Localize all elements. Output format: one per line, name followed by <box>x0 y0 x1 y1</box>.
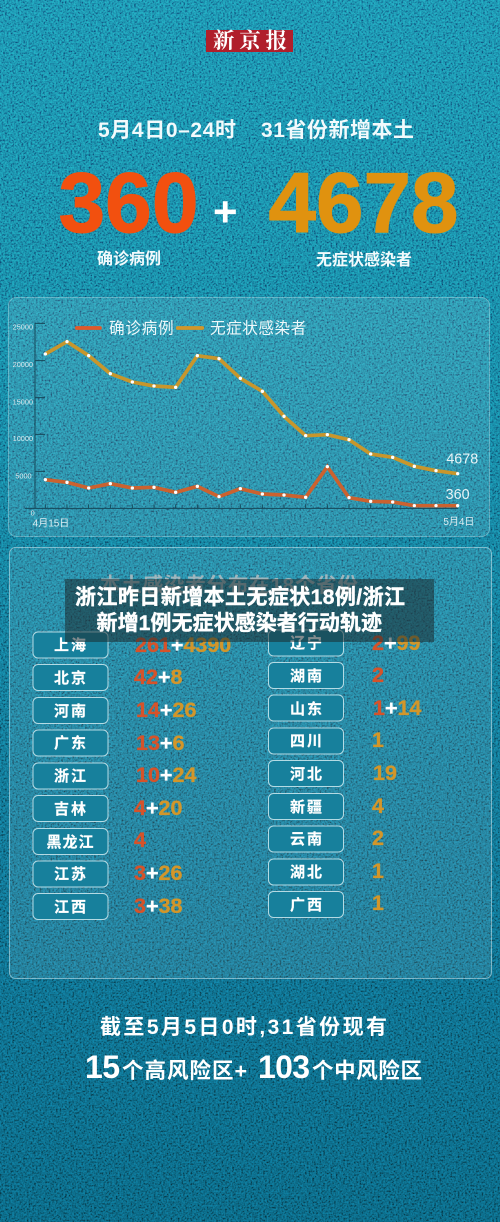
row: 江西: 3+38 <box>134 894 182 918</box>
row: 湖南: 2 <box>372 663 384 687</box>
row: 辽宁 <box>268 630 420 656</box>
end value labels: 4678 <box>446 451 478 467</box>
line: confirmed <box>45 467 458 506</box>
headline overlay banner: 新增1例无症状感染者行动轨迹 <box>96 611 382 635</box>
row: 辽宁: 辽宁 <box>290 634 324 652</box>
legend: 确诊病例 <box>109 320 174 338</box>
y axis labels: 15000 <box>13 398 33 407</box>
panel heading: 本土感染者分布在18个省份 <box>100 574 358 597</box>
row: 黑龙江: 黑龙江 <box>46 833 95 851</box>
row: 山东 <box>268 695 421 721</box>
footer: risk area summary: 个高风险区+ <box>122 1058 247 1083</box>
footer: risk area summary <box>85 1016 422 1085</box>
headline overlay banner <box>65 579 434 642</box>
row: 云南: 云南 <box>290 831 324 848</box>
row: 江西 <box>33 894 182 920</box>
plus sign: + <box>213 188 238 235</box>
y axis labels <box>13 323 35 517</box>
row: 上海 <box>33 632 231 658</box>
row: 河南: 14+26 <box>136 698 196 722</box>
line chart <box>13 320 478 529</box>
x axis labels: 4月15日 <box>33 517 69 529</box>
row: 广西: 广西 <box>290 896 324 914</box>
row: 山东: 1+14 <box>373 696 421 720</box>
x axis labels <box>33 516 474 529</box>
row: 浙江: 10+24 <box>136 763 196 787</box>
row: 江苏: 3+26 <box>134 861 182 885</box>
row: 新疆 <box>268 794 384 820</box>
row: 浙江: 浙江 <box>54 767 88 785</box>
row: 广西 <box>268 891 384 918</box>
row: 云南 <box>268 826 384 852</box>
row: 辽宁: 2+99 <box>372 631 420 655</box>
row: 云南: 2 <box>372 826 384 850</box>
row: 新疆: 4 <box>372 794 384 818</box>
footer: risk area summary: 103 <box>258 1049 310 1085</box>
row: 江西: 江西 <box>54 899 88 916</box>
heading: date and scope <box>98 118 414 142</box>
row: 北京 <box>33 664 182 690</box>
y axis labels: 0 <box>31 508 35 517</box>
row: 北京: 北京 <box>54 669 88 687</box>
y axis labels: 10000 <box>13 434 33 443</box>
legend <box>77 320 306 338</box>
big number: confirmed cases: 360 <box>58 156 198 251</box>
big number: asymptomatic cases: 无症状感染者 <box>316 250 412 269</box>
row: 江苏: 江苏 <box>54 866 88 883</box>
heading: date and scope: 5月4日0–24时 <box>98 119 236 142</box>
panel: provincial distribution <box>10 548 492 978</box>
big number: asymptomatic cases: 4678 <box>268 156 458 251</box>
logo: 新京报: 新京报 <box>213 28 287 53</box>
row: 广西: 1 <box>372 891 384 915</box>
row: 四川 <box>268 728 384 754</box>
row: 河北 <box>268 760 397 786</box>
y axis labels: 25000 <box>13 323 33 332</box>
y axis labels: 5000 <box>15 471 32 480</box>
row: 吉林: 4+20 <box>134 796 182 820</box>
row: 湖北 <box>268 859 384 885</box>
row: 新疆: 新疆 <box>290 798 324 816</box>
legend: 无症状感染者 <box>210 320 306 338</box>
end value labels: 360 <box>446 487 470 503</box>
row: 湖南: 湖南 <box>290 668 324 685</box>
row: 黑龙江 <box>33 828 146 854</box>
row: 河北: 河北 <box>290 766 324 783</box>
row: 四川: 四川 <box>290 733 324 750</box>
end value labels <box>446 451 478 503</box>
x axis labels: 5月4日 <box>443 516 474 528</box>
row: 湖南 <box>268 662 384 688</box>
heading: date and scope: 31省份新增本土 <box>261 118 414 142</box>
row: 浙江 <box>33 763 196 789</box>
line: asymptomatic <box>45 342 458 474</box>
row: 湖北: 1 <box>372 859 384 883</box>
row: 北京: 42+8 <box>134 665 182 689</box>
big number: confirmed cases: 确诊病例 <box>97 249 161 268</box>
panel: trend chart <box>8 298 490 536</box>
row: 上海: 261+4390 <box>135 633 231 657</box>
footer: risk area summary: 截至5月5日0时,31省份现有 <box>100 1016 387 1039</box>
row: 山东: 山东 <box>290 700 324 718</box>
headline overlay banner: 浙江昨日新增本土无症状18例/浙江 <box>75 585 405 609</box>
row: 广东 <box>33 730 184 756</box>
y axis labels: 20000 <box>13 360 33 369</box>
row: 黑龙江: 4 <box>134 828 146 852</box>
row: 吉林: 吉林 <box>54 800 88 818</box>
footer: risk area summary: 个中风险区 <box>312 1058 422 1083</box>
row: 河北: 19 <box>373 761 397 785</box>
row: 江苏 <box>33 861 182 887</box>
footer: risk area summary: 15 <box>85 1049 120 1085</box>
row: 四川: 1 <box>372 728 384 752</box>
row: 河南 <box>33 698 196 724</box>
row: 吉林 <box>33 796 182 822</box>
row: 广东: 13+6 <box>136 731 184 755</box>
row: 广东: 广东 <box>54 734 88 752</box>
row: 湖北: 湖北 <box>290 864 324 881</box>
row: 上海: 上海 <box>54 636 88 654</box>
row: 河南: 河南 <box>54 703 88 720</box>
